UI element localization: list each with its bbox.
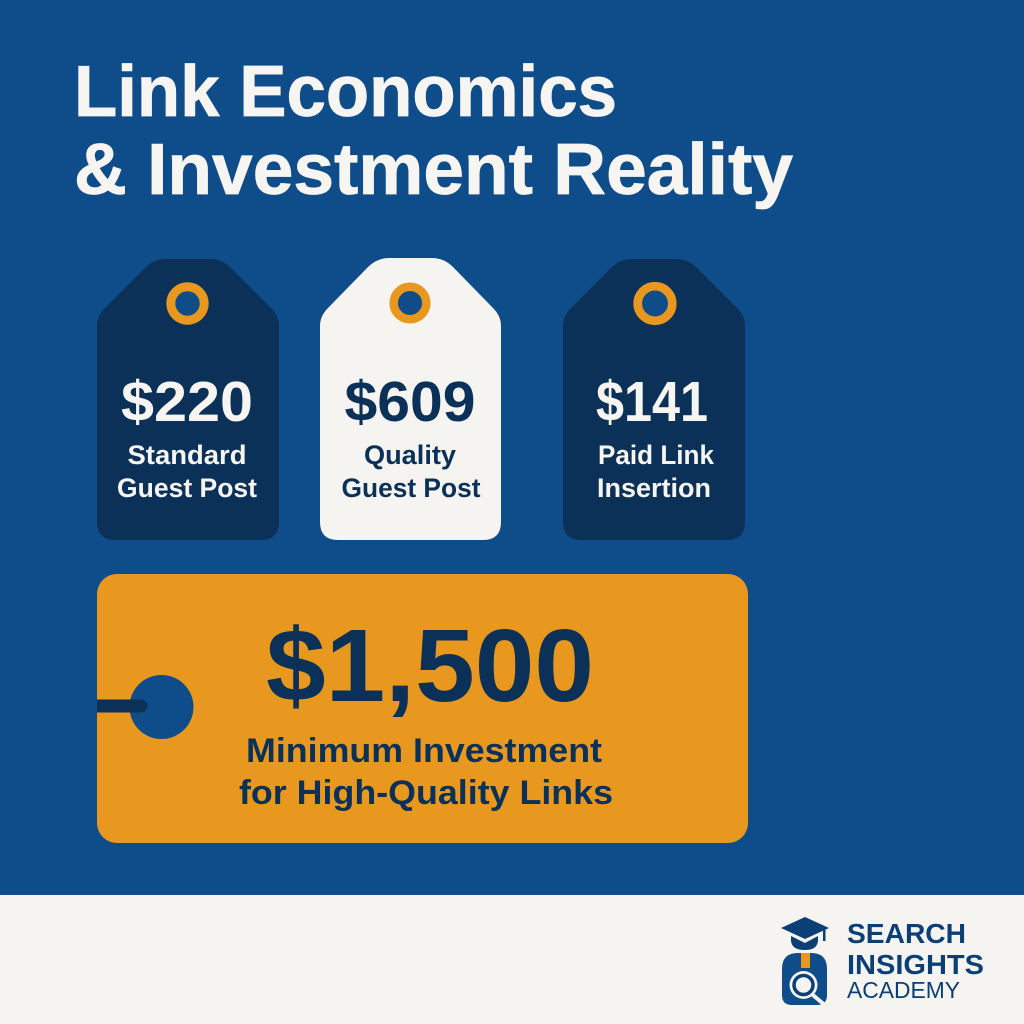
icon: magnifier	[790, 971, 826, 1006]
label: Insertion	[597, 473, 711, 503]
icon: body	[782, 953, 827, 1005]
label	[597, 440, 715, 503]
large price tag: minimum investment	[97, 574, 748, 843]
label: Minimum Investment	[246, 732, 602, 770]
label: Guest Post	[342, 473, 481, 503]
logo wordmark: SEARCH	[847, 918, 966, 949]
tag hole and string	[97, 675, 194, 739]
icon: cap	[781, 917, 829, 950]
logo wordmark: ACADEMY	[847, 977, 960, 1003]
label: Guest Post	[117, 473, 257, 503]
eyelet	[171, 287, 204, 320]
title: Link Economics	[74, 52, 617, 132]
logo wordmark	[847, 918, 984, 1003]
footer band	[0, 895, 1024, 1024]
price tag: standard guest post	[97, 259, 279, 540]
label	[342, 440, 481, 503]
price: $609	[344, 370, 476, 434]
logo wordmark: INSIGHTS	[847, 949, 984, 980]
price: $141	[596, 370, 708, 434]
price: $1,500	[266, 608, 594, 723]
icon: tie	[801, 953, 810, 968]
title	[74, 52, 793, 210]
label: for High-Quality Links	[239, 774, 613, 812]
eyelet	[638, 286, 672, 321]
label	[239, 732, 613, 812]
eyelet	[394, 287, 426, 319]
title: & Investment Reality	[74, 130, 793, 210]
price tag: quality guest post	[320, 258, 501, 540]
label: Paid Link	[598, 440, 715, 470]
label: Standard	[128, 440, 246, 470]
label: Quality	[364, 440, 456, 470]
label	[117, 440, 257, 503]
price tag: paid link insertion	[563, 259, 745, 540]
logo icon: graduate with magnifier	[781, 917, 829, 1006]
price: $220	[121, 370, 253, 434]
